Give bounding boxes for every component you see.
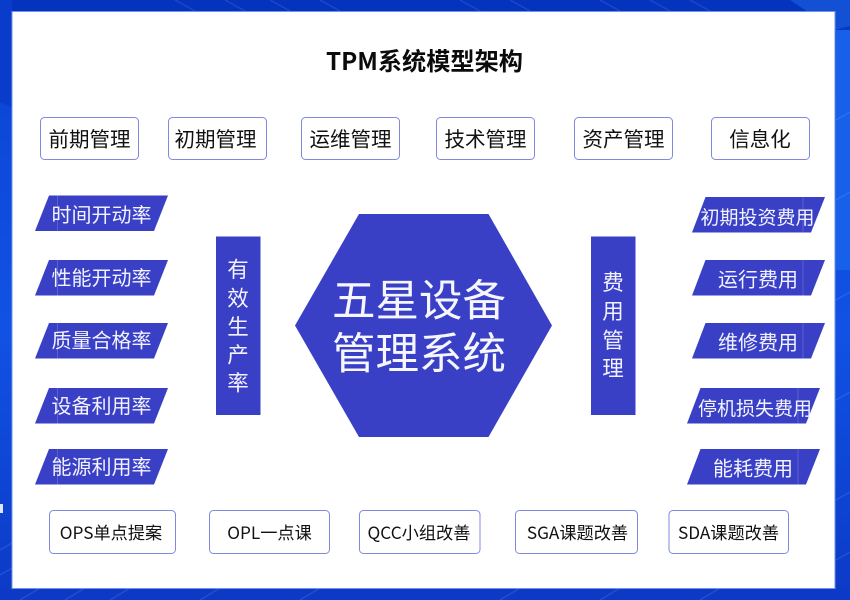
label: 能源利用率: 能源利用率 xyxy=(52,451,152,480)
label: 性能开动率 xyxy=(35,260,168,296)
label: 维修费用: 维修费用 xyxy=(718,326,798,356)
vertical label: 费用管理: 费 xyxy=(602,266,624,297)
vertical label: 有效生产率: 生 xyxy=(227,310,249,342)
box: 初期管理 xyxy=(168,118,266,160)
box: 前期管理 xyxy=(40,118,138,160)
box: OPL一点课 xyxy=(210,510,330,554)
label: 质量合格率 xyxy=(35,323,168,358)
central hexagon: 管理系统 xyxy=(332,319,506,382)
box: SGA课题改善: SGA课题改善 xyxy=(527,519,628,544)
central hexagon xyxy=(295,214,552,437)
box: 信息化: 信息化 xyxy=(729,122,791,152)
label: 性能开动率: 性能开动率 xyxy=(52,262,152,291)
vertical label: 费用管理: 用 xyxy=(602,295,624,326)
vertical label: 费用管理: 理 xyxy=(602,352,624,383)
label: 质量合格率: 质量合格率 xyxy=(52,324,152,354)
label: 停机损失费用: 停机损失费用 xyxy=(698,394,812,421)
box: OPL一点课: OPL一点课 xyxy=(227,519,312,544)
central hexagon: 五星设备 xyxy=(332,266,506,329)
vertical label: 有效生产率: 有 xyxy=(227,253,249,284)
label: 运行费用 xyxy=(692,260,825,296)
box: 技术管理: 技术管理 xyxy=(444,122,526,152)
label: 能耗费用 xyxy=(687,449,820,484)
box: 资产管理: 资产管理 xyxy=(582,122,664,152)
box: SGA课题改善 xyxy=(516,510,638,554)
box: 信息化 xyxy=(712,118,810,160)
box: 技术管理 xyxy=(436,118,534,160)
vertical label: 有效生产率: 产 xyxy=(227,338,249,370)
top row of management boxes xyxy=(40,118,810,160)
box: OPS单点提案 xyxy=(50,510,176,554)
box: 运维管理 xyxy=(302,118,400,160)
label: 初期投资费用: 初期投资费用 xyxy=(700,203,815,230)
box: 初期管理: 初期管理 xyxy=(174,122,256,152)
vertical label: 有效生产率 xyxy=(216,236,260,415)
label: 设备利用率 xyxy=(35,388,168,424)
vertical label: 费用管理 xyxy=(591,236,636,415)
box: 运维管理: 运维管理 xyxy=(310,122,392,152)
left column of rate labels xyxy=(35,196,168,484)
box: OPS单点提案: OPS单点提案 xyxy=(60,519,162,544)
label: 时间开动率 xyxy=(35,196,168,231)
label: 初期投资费用 xyxy=(692,197,825,232)
vertical label: 有效生产率: 效 xyxy=(227,282,249,313)
box: SDA课题改善: SDA课题改善 xyxy=(678,519,779,544)
box: 资产管理 xyxy=(574,118,672,160)
label: 设备利用率: 设备利用率 xyxy=(52,390,152,419)
vertical label: 有效生产率: 率 xyxy=(227,366,249,398)
bottom row of improvement boxes xyxy=(50,510,788,554)
vertical label: 费用管理: 管 xyxy=(602,324,624,355)
label: 时间开动率: 时间开动率 xyxy=(52,199,152,228)
box: QCC小组改善: QCC小组改善 xyxy=(368,519,470,544)
box: SDA课题改善 xyxy=(669,510,788,554)
box: 前期管理: 前期管理 xyxy=(48,122,130,152)
right column of cost labels xyxy=(687,197,825,484)
label: 运行费用: 运行费用 xyxy=(718,264,798,292)
label: 维修费用 xyxy=(692,323,825,358)
box: QCC小组改善 xyxy=(360,510,480,554)
label: 能耗费用: 能耗费用 xyxy=(713,452,793,482)
title: TPM系统模型架构 xyxy=(326,42,523,77)
label: 停机损失费用 xyxy=(687,388,820,424)
label: 能源利用率 xyxy=(35,449,168,484)
